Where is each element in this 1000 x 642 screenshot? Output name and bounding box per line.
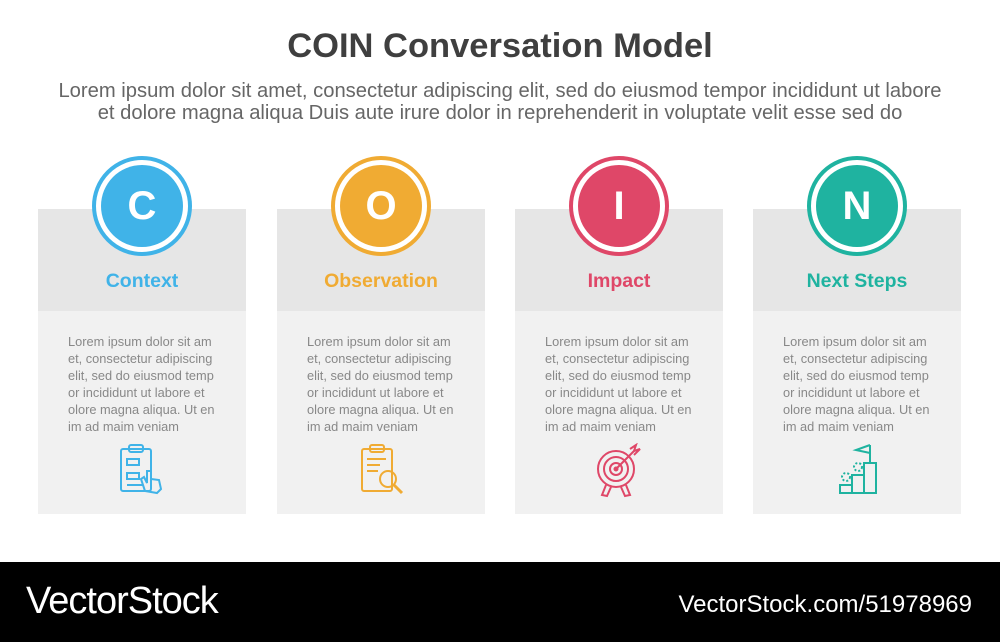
text context: [68, 334, 215, 434]
label next steps: Next Steps: [807, 270, 907, 292]
footer brand: VectorStock: [26, 580, 218, 622]
text impact: Lorem ipsum dolor sit am: [545, 334, 689, 349]
text next steps: [783, 334, 930, 434]
panel: next steps: [753, 156, 961, 514]
subtitle: [58, 80, 942, 124]
text context: or incididunt ut labore et: [68, 385, 205, 400]
text next steps: Lorem ipsum dolor sit am: [783, 334, 927, 349]
text observation: [307, 334, 454, 434]
icon: clipboard hand: [120, 444, 162, 494]
text impact: elit, sed do eiusmod temp: [545, 368, 691, 383]
text impact: olore magna aliqua. Ut en: [545, 402, 692, 417]
icon: clipboard magnifier: [361, 444, 403, 494]
text next steps: et, consectetur adipiscing: [783, 351, 927, 366]
text next steps: im ad maim veniam: [783, 419, 894, 434]
text observation: elit, sed do eiusmod temp: [307, 368, 453, 383]
circle C: [92, 156, 192, 256]
text impact: or incididunt ut labore et: [545, 385, 682, 400]
circle I: [569, 156, 669, 256]
text context: olore magna aliqua. Ut en: [68, 402, 215, 417]
subtitle: et dolore magna aliqua Duis aute irure dolor in reprehenderit in voluptate velit esse sed do: [98, 102, 902, 124]
circle O: [331, 156, 431, 256]
footer bar: [0, 562, 1000, 642]
text context: Lorem ipsum dolor sit am: [68, 334, 212, 349]
panel: impact: [515, 156, 723, 514]
panel: observation: [277, 156, 485, 514]
text next steps: or incididunt ut labore et: [783, 385, 920, 400]
text impact: im ad maim veniam: [545, 419, 656, 434]
text observation: olore magna aliqua. Ut en: [307, 402, 454, 417]
icon: target: [597, 443, 641, 498]
title: COIN Conversation Model: [287, 27, 713, 65]
text observation: im ad maim veniam: [307, 419, 418, 434]
label observation: Observation: [324, 270, 438, 292]
footer id: VectorStock.com/51978969: [678, 591, 972, 618]
text next steps: elit, sed do eiusmod temp: [783, 368, 929, 383]
text context: elit, sed do eiusmod temp: [68, 368, 214, 383]
circle O: O: [365, 184, 397, 228]
text impact: et, consectetur adipiscing: [545, 351, 689, 366]
circle I: I: [613, 184, 625, 228]
panel: context: [38, 156, 246, 514]
text observation: Lorem ipsum dolor sit am: [307, 334, 451, 349]
circle N: [807, 156, 907, 256]
text impact: [545, 334, 692, 434]
text observation: et, consectetur adipiscing: [307, 351, 451, 366]
icon: steps flag: [839, 444, 877, 494]
label impact: Impact: [588, 270, 650, 292]
text context: im ad maim veniam: [68, 419, 179, 434]
subtitle: Lorem ipsum dolor sit amet, consectetur adipiscing elit, sed do eiusmod tempor incididunt ut labore: [58, 80, 942, 102]
label context: Context: [106, 270, 178, 292]
circle C: C: [128, 184, 156, 228]
text context: et, consectetur adipiscing: [68, 351, 212, 366]
circle N: N: [843, 184, 871, 228]
text next steps: olore magna aliqua. Ut en: [783, 402, 930, 417]
text observation: or incididunt ut labore et: [307, 385, 444, 400]
